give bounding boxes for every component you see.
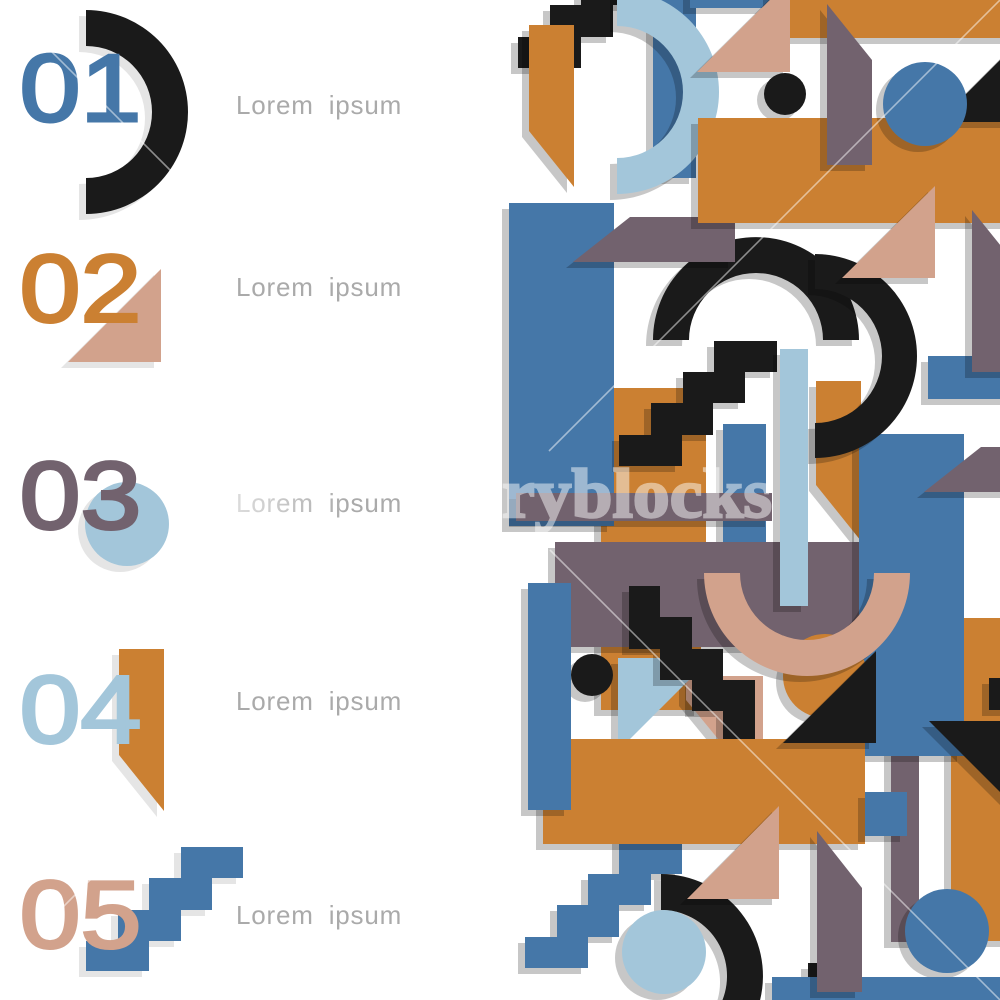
blue bar top bbox=[690, 0, 780, 8]
tan triangle top bbox=[697, 0, 790, 72]
black small tab bbox=[808, 963, 820, 993]
mauve pentagon right bbox=[972, 210, 1000, 372]
blue bar right bbox=[928, 356, 1000, 399]
icon: blue stairs bbox=[86, 847, 243, 971]
label 04: Lorem ipsum bbox=[236, 686, 402, 716]
tan triangle centre bbox=[842, 186, 935, 278]
icon: orange pentagon bbox=[119, 649, 164, 811]
blue large right bbox=[859, 434, 964, 756]
mauve vertical bar bbox=[891, 700, 919, 942]
orange large bar bbox=[698, 118, 1000, 223]
orange bar top right bbox=[770, 0, 1000, 38]
black stairs descending bbox=[629, 586, 755, 745]
blue large left bbox=[509, 203, 614, 526]
mauve pentagon bottom bbox=[817, 831, 862, 992]
black stairs top left bbox=[518, 0, 644, 68]
item 02 bbox=[20, 235, 402, 362]
black half ring bottom bbox=[661, 874, 763, 1000]
blue circle top right bbox=[883, 62, 967, 146]
label 03: Lorem ipsum bbox=[236, 488, 402, 518]
tan triangle bottom bbox=[687, 806, 779, 899]
light blue vertical bar bbox=[780, 349, 808, 606]
blue bar centre bbox=[723, 424, 766, 574]
blue bar bottom bbox=[772, 977, 1000, 1000]
orange circle bbox=[783, 634, 867, 718]
black half ring arch bbox=[653, 237, 859, 340]
icon: tan triangle bbox=[68, 269, 161, 362]
black stairs centre bbox=[619, 341, 777, 466]
orange tall right bbox=[951, 618, 1000, 941]
tan shape behind stairs bbox=[686, 676, 763, 745]
item 01 bbox=[20, 10, 402, 214]
light blue circle bottom bbox=[622, 910, 706, 994]
black triangle top right bbox=[938, 40, 1000, 122]
number 03: 03 bbox=[20, 442, 141, 549]
black circle lower left bbox=[571, 654, 613, 696]
icon: light blue circle bbox=[85, 482, 169, 566]
mauve pentagon top bbox=[827, 4, 872, 165]
orange pentagon centre bbox=[816, 381, 861, 541]
blue stairs bottom bbox=[525, 830, 682, 968]
watermark text: ryblocks bbox=[502, 456, 772, 533]
number 05: 05 bbox=[20, 861, 141, 968]
black small bar right bbox=[989, 678, 1000, 710]
mauve large rectangle bbox=[555, 542, 860, 647]
item 04 bbox=[20, 649, 402, 811]
mauve narrow bar bbox=[516, 493, 772, 521]
mauve horizontal pentagon bbox=[573, 217, 735, 262]
label 02: Lorem ipsum bbox=[236, 272, 402, 302]
blue small square bbox=[865, 792, 907, 836]
black triangle right bbox=[929, 721, 1000, 814]
list: numbered items bbox=[20, 10, 402, 971]
item 03 bbox=[20, 442, 402, 566]
number 04: 04 bbox=[20, 656, 141, 763]
black half ring right bbox=[815, 254, 917, 458]
number 01: 01 bbox=[20, 34, 141, 141]
panel: geometric collage bbox=[509, 0, 1000, 1000]
light blue half ring bbox=[617, 0, 719, 194]
mauve small pentagon right bbox=[924, 447, 1000, 492]
blue bar behind arc bbox=[653, 0, 696, 178]
number 02: 02 bbox=[20, 235, 141, 342]
item 05 bbox=[20, 847, 402, 971]
light blue triangle bbox=[618, 658, 711, 751]
black triangle centre bbox=[783, 651, 876, 743]
orange rectangle lower bbox=[601, 630, 701, 710]
label 01: Lorem ipsum bbox=[236, 90, 402, 120]
label 05: Lorem ipsum bbox=[236, 900, 402, 930]
tan half ring bbox=[704, 573, 910, 676]
orange large bottom bar bbox=[543, 739, 865, 844]
black circle top bbox=[764, 73, 806, 115]
orange rectangle centre bbox=[601, 388, 706, 542]
blue circle bottom right bbox=[905, 889, 989, 973]
orange pentagon top left bbox=[529, 25, 574, 187]
icon: black half ring bbox=[86, 10, 188, 214]
blue bar lower left bbox=[528, 583, 571, 810]
